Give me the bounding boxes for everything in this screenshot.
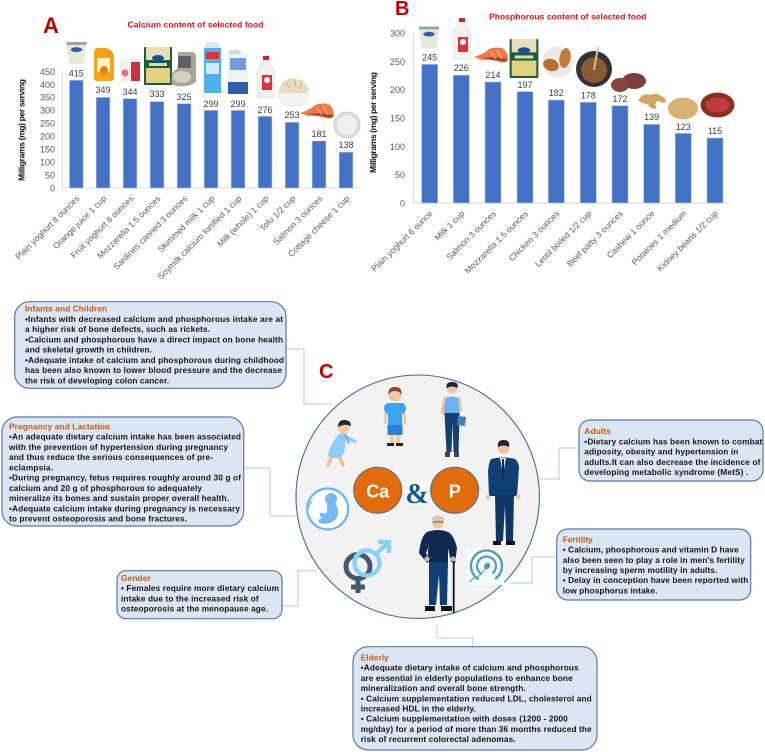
text: elderly points: • Calcium supplementation reduced LDL, cholesterol and bbox=[361, 693, 592, 703]
value labels: 325 bbox=[176, 92, 192, 102]
text: infants and children points bbox=[25, 314, 284, 386]
value labels: 226 bbox=[454, 63, 469, 73]
category labels: Tofu 1/2 cup bbox=[258, 193, 298, 233]
icon: man in suit bbox=[486, 440, 520, 545]
heading: gender: Gender bbox=[121, 573, 151, 583]
category labels: Milk 1 cup bbox=[432, 208, 467, 242]
y axis ticks: 350 bbox=[40, 92, 55, 102]
text: adults point: adiposity, obesity and hypertension in bbox=[584, 447, 738, 457]
text: pregnancy and lactation points: mineralize its bones and sustain proper overall health. bbox=[9, 493, 229, 503]
text: pregnancy and lactation points: •An adequate dietary calcium intake has been associated bbox=[9, 432, 241, 442]
text: adults point: adults.It can also decrease the incidence of bbox=[584, 457, 761, 467]
y axis ticks: 150 bbox=[40, 144, 55, 154]
text: pregnancy and lactation points: and thus reduce the serious consequences of pre- bbox=[9, 452, 213, 462]
text: infants and children points: and skeletal growth in children. bbox=[25, 345, 152, 355]
category labels: Kidney beans 1/2 cup bbox=[655, 208, 720, 273]
category labels bbox=[13, 193, 352, 281]
text: pregnancy and lactation points: eclampsia. bbox=[9, 462, 53, 472]
category labels: Salmon 3 ounces bbox=[444, 208, 498, 262]
value labels: 415 bbox=[69, 68, 84, 78]
heading: panel letter C: C bbox=[319, 361, 333, 383]
text: elderly points: risk of recurrent colorectal adenomas. bbox=[361, 734, 516, 744]
text: gender point: intake due to the increased risk of bbox=[121, 593, 259, 603]
category labels: Fruit yoghurt 8 ounces bbox=[69, 193, 135, 260]
heading: adults: Adults bbox=[584, 426, 611, 436]
text: elderly points: increased HDL in the elderly. bbox=[361, 704, 476, 714]
text: infants and children points: •Calcium and phosphorous have a direct impact on bone health bbox=[25, 334, 283, 344]
value labels: 349 bbox=[95, 85, 111, 95]
value labels: 182 bbox=[549, 88, 564, 98]
panel: fertility bbox=[557, 529, 751, 600]
heading: phosphorous chart title: Phosphorous content of selected food bbox=[489, 12, 646, 22]
y axis title: Milligrams (mg) per serving bbox=[16, 79, 26, 181]
bars bbox=[422, 64, 723, 203]
value labels: 138 bbox=[338, 140, 354, 150]
text: adults point: •Dietary calcium has been known to combat bbox=[584, 436, 763, 446]
icon: boy bbox=[384, 387, 406, 446]
y axis ticks: 0 bbox=[400, 198, 405, 208]
text: pregnancy and lactation points: with the prevention of hypertension during pregnancy bbox=[8, 442, 228, 452]
y axis ticks: 200 bbox=[390, 85, 405, 95]
value labels bbox=[422, 52, 722, 136]
icons: calcium foods bbox=[66, 42, 360, 138]
panel: central life stage circle bbox=[296, 375, 539, 618]
panel: calcium bar chart bbox=[13, 13, 360, 281]
text: elderly points: are essential in elderly populations to enhance bone bbox=[361, 673, 573, 683]
icon: phosphorus circle: P bbox=[449, 482, 461, 502]
value labels: 245 bbox=[422, 52, 437, 62]
text: gender point: • Females require more dietary calcium bbox=[121, 583, 279, 593]
value labels: 299 bbox=[203, 99, 219, 109]
y axis ticks: 300 bbox=[40, 106, 55, 116]
heading: fertility: Fertility bbox=[563, 535, 593, 545]
text: infants and children points: has been also known to lower blood pressure and the decrease bbox=[25, 365, 282, 375]
value labels: 181 bbox=[311, 129, 327, 139]
heading: panel letter A: A bbox=[43, 13, 59, 38]
text: gender point: osteoporosis at the menopause age. bbox=[121, 604, 268, 614]
category labels: Mozzarella 1.5 ounces bbox=[463, 208, 530, 276]
category labels: Cottage cheese 1 cup bbox=[286, 193, 352, 259]
icon: sperm and egg bbox=[465, 545, 508, 587]
y axis ticks: 250 bbox=[40, 118, 55, 128]
text: adults point: developing metabolic syndrome (MetS) . bbox=[584, 467, 748, 477]
text: elderly points: mg/day) for a period of more than 36 months reduced the bbox=[361, 724, 592, 734]
category labels: Sardines canned 3 ounces bbox=[111, 193, 189, 272]
text: pregnancy and lactation points: •Adequate calcium intake during pregnancy is necessary bbox=[9, 503, 240, 513]
y axis ticks bbox=[40, 67, 55, 194]
value labels: 299 bbox=[230, 99, 246, 109]
text: infants and children points: •Adequate intake of calcium and phosphorous during childhood bbox=[25, 355, 284, 365]
y axis ticks: 250 bbox=[390, 57, 405, 67]
y axis ticks: 100 bbox=[40, 158, 55, 168]
value labels: 214 bbox=[485, 70, 501, 80]
text: fertility points: • Calcium, phosphorous and vitamin D have bbox=[563, 545, 739, 555]
heading: pregnancy and lactation: Pregnancy and Lactation bbox=[9, 422, 110, 432]
y axis ticks bbox=[390, 28, 405, 208]
text: fertility points: • Delay in conception have been reported with bbox=[563, 575, 748, 585]
category labels: Beef patty 3 ounces bbox=[565, 208, 625, 269]
value labels: 253 bbox=[284, 110, 300, 120]
heading: elderly: Elderly bbox=[361, 653, 389, 663]
y axis ticks: 200 bbox=[40, 132, 55, 142]
icons: phosphorous foods bbox=[419, 18, 734, 120]
panel: gender bbox=[117, 571, 282, 619]
heading: infants and children: Infants and Children bbox=[25, 304, 107, 314]
icon: fetus bbox=[307, 488, 348, 530]
value labels: 344 bbox=[122, 87, 138, 97]
y axis ticks: 50 bbox=[395, 170, 405, 180]
y axis ticks: 450 bbox=[40, 67, 55, 77]
value labels: 276 bbox=[257, 105, 273, 115]
panel: adults bbox=[579, 420, 763, 481]
text: infants and children points: •Infants with decreased calcium and phosphorous intake are at bbox=[25, 314, 283, 324]
connector lines bbox=[244, 349, 579, 647]
value labels: 123 bbox=[676, 122, 691, 132]
category labels: Lentil boiled 1/2 cup bbox=[533, 208, 594, 269]
y axis ticks: 300 bbox=[390, 28, 405, 38]
text: elderly points: • Calcium supplementation with doses (1200 - 2000 bbox=[361, 714, 568, 724]
category labels: Plain yoghurt 8 ounces bbox=[13, 193, 81, 262]
icon: gender symbols bbox=[346, 542, 389, 593]
icon: teen student bbox=[442, 382, 466, 457]
text: fertility points bbox=[563, 545, 748, 595]
y axis ticks: 100 bbox=[390, 142, 405, 152]
text: elderly points: mineralization and overall bone strength. bbox=[361, 683, 526, 693]
icon: elderly man bbox=[419, 516, 457, 613]
text: pregnancy and lactation points: •During pregnancy, fetus requires roughly around 30 g of bbox=[9, 472, 241, 482]
category labels: Potatoes 1 medium bbox=[630, 208, 688, 267]
category labels: Mozzarella 1.5 ounces bbox=[95, 193, 162, 261]
bars bbox=[70, 80, 353, 188]
category labels: Soymilk calcium fortified 1 cup bbox=[156, 193, 244, 281]
y axis ticks: 150 bbox=[390, 114, 405, 124]
icon: baby bbox=[328, 420, 357, 465]
y axis ticks: 400 bbox=[40, 80, 55, 90]
icon: calcium circle: Ca bbox=[366, 482, 390, 502]
text: infants and children points: a higher risk of bone defects, such as rickets. bbox=[25, 324, 210, 334]
text: adults point bbox=[584, 436, 763, 477]
text: elderly points bbox=[361, 663, 592, 744]
y axis title: Milligrams (mg) per serving bbox=[368, 72, 378, 173]
panel: phosphorous bar chart bbox=[368, 0, 734, 276]
category labels bbox=[369, 208, 720, 276]
icon: phosphorus circle bbox=[431, 467, 479, 513]
y axis ticks: 0 bbox=[50, 184, 55, 194]
panel: infants and children bbox=[15, 302, 286, 388]
category labels: Chicken 3 ounces bbox=[507, 208, 561, 263]
text: gender point bbox=[121, 583, 279, 614]
text: pregnancy and lactation points: calcium and 20 g of phosphorous to adequately bbox=[9, 483, 202, 493]
category labels: Skimmed milk 1 cup bbox=[156, 193, 217, 254]
category labels: Cashew 1 ounce bbox=[605, 208, 657, 260]
value labels: 333 bbox=[149, 89, 165, 99]
text: fertility points: by increasing sperm motility in adults. bbox=[563, 565, 717, 575]
value labels: 178 bbox=[581, 90, 596, 100]
icon: calcium circle bbox=[354, 467, 402, 513]
icon: ampersand: & bbox=[405, 479, 429, 510]
panel: elderly bbox=[353, 647, 597, 750]
value labels: 115 bbox=[708, 126, 722, 136]
category labels: Plain yoghurt 6 ounce bbox=[369, 208, 435, 274]
value labels: 197 bbox=[517, 80, 533, 90]
category labels: Orange juice 1 cup bbox=[51, 193, 109, 251]
text: fertility points: also been seen to play a role in men's fertility bbox=[563, 555, 745, 565]
text: fertility points: low phosphorus intake. bbox=[563, 585, 657, 595]
y axis ticks: 50 bbox=[45, 170, 55, 180]
category labels: Milk (whole) 1 cup bbox=[215, 193, 271, 249]
text: pregnancy and lactation points: to prevent osteoporosis and bone fractures. bbox=[9, 514, 187, 524]
value labels bbox=[69, 68, 354, 150]
category labels: Salmon 3 ounces bbox=[271, 193, 324, 247]
text: elderly points: •Adequate dietary intake of calcium and phosphorous bbox=[361, 663, 579, 673]
value labels: 139 bbox=[644, 112, 659, 122]
text: infants and children points: the risk of developing colon cancer. bbox=[25, 376, 169, 386]
text: pregnancy and lactation points bbox=[8, 432, 241, 524]
panel: pregnancy and lactation bbox=[2, 417, 244, 526]
heading: calcium chart title: Calcium content of selected food bbox=[128, 19, 264, 29]
value labels: 172 bbox=[612, 94, 628, 104]
